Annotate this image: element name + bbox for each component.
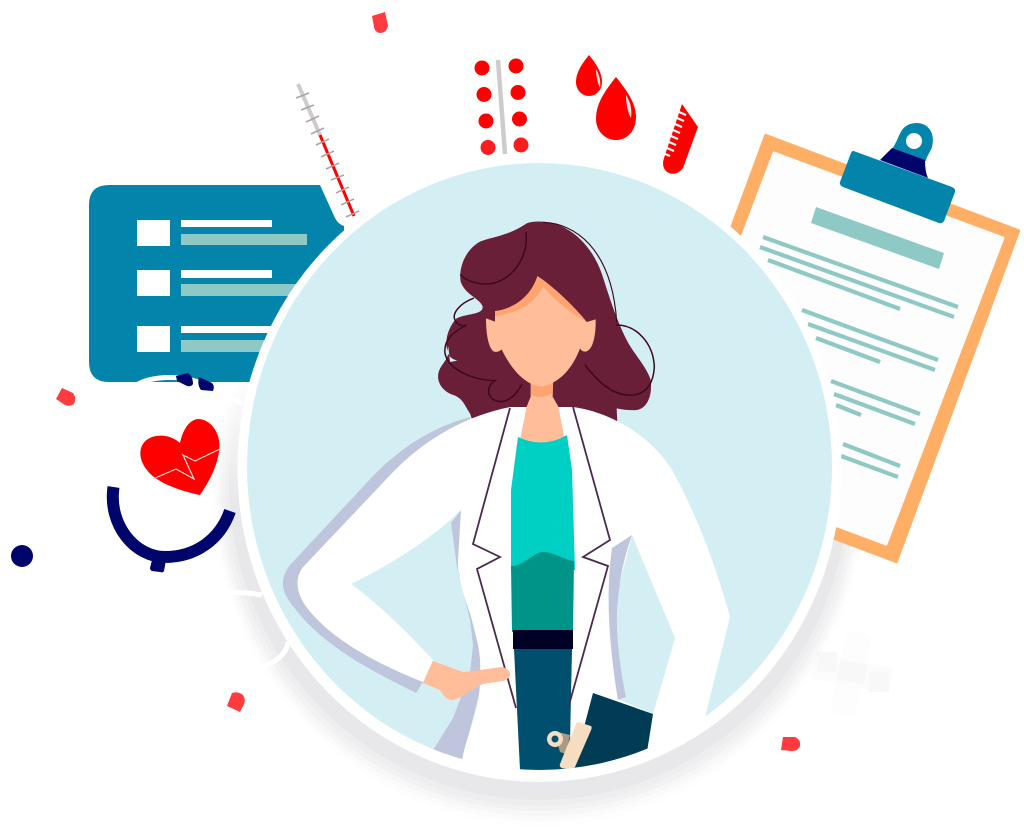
small clipboard — [547, 693, 653, 769]
hand — [423, 661, 510, 700]
trousers — [514, 649, 572, 770]
coat: lavender lining right — [609, 535, 632, 700]
stethoscope: white tube — [135, 377, 288, 668]
drop shadow under circle — [221, 418, 852, 811]
panel: checklist card — [89, 185, 344, 382]
head: face, neck and chest — [486, 276, 596, 443]
icon: test tube — [663, 104, 698, 174]
clipboard text lines — [760, 237, 958, 477]
coat: right gap — [612, 535, 675, 714]
icon: blood drops — [576, 55, 636, 140]
coat: lavender sleeve shadow — [283, 417, 470, 693]
shirt lower — [511, 552, 574, 632]
icon: thermometer — [296, 84, 359, 217]
figure: doctor — [283, 221, 730, 790]
forehead shadow — [495, 276, 587, 325]
pill: lower right — [781, 737, 800, 751]
pill: lower left — [227, 692, 245, 712]
circle: white ring — [238, 156, 842, 782]
neck shadow — [531, 382, 553, 397]
hair — [438, 221, 654, 423]
clipboard clip — [840, 123, 955, 223]
clipboard heading bar — [811, 207, 944, 269]
stethoscope: navy arc — [113, 487, 230, 572]
belt — [513, 630, 573, 649]
face — [486, 287, 596, 387]
coat: lavender lining left — [432, 510, 480, 762]
pill: top — [372, 12, 388, 33]
pill: left — [56, 388, 75, 406]
icon: pill blister pack — [474, 58, 528, 155]
coat: right side and torso — [458, 407, 730, 790]
coat: left sleeve — [298, 407, 520, 682]
stethoscope: ear tips — [176, 373, 214, 391]
icon: heart — [140, 419, 220, 495]
coat lapels — [473, 407, 610, 708]
shirt — [511, 435, 575, 570]
stethoscope: navy dot — [11, 545, 33, 567]
icon: bandage — [810, 630, 894, 718]
circle: light blue background — [247, 163, 832, 770]
icon: clipboard — [644, 123, 1018, 561]
neck and chest — [520, 382, 564, 442]
